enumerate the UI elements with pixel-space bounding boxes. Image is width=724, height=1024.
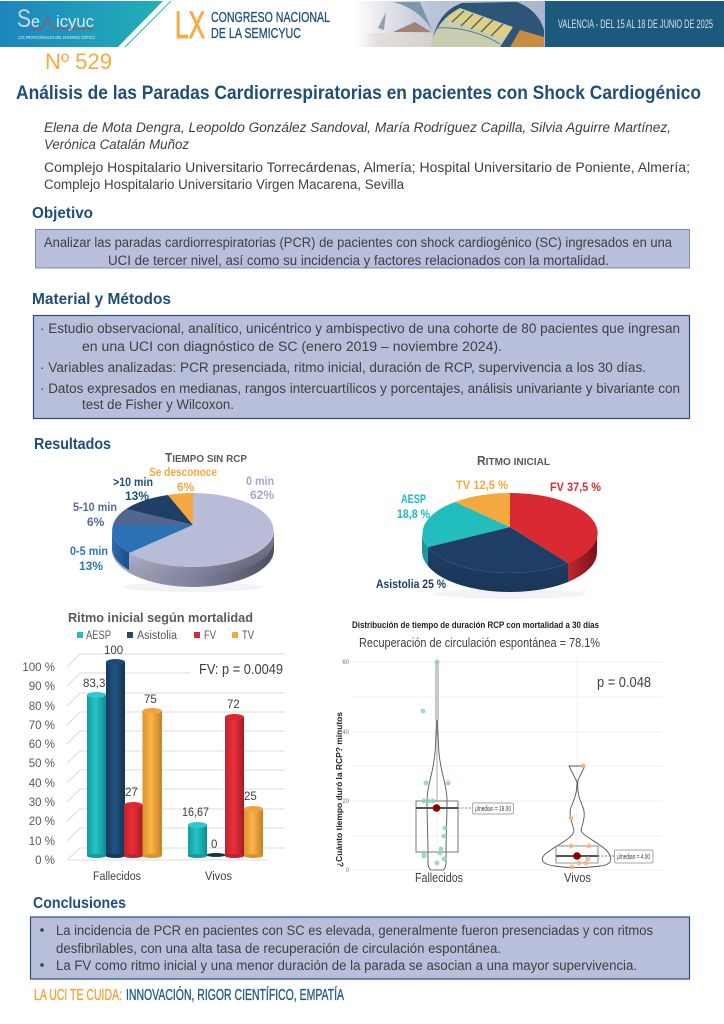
y axis labels: 50 % <box>29 758 55 770</box>
affiliations: Complejo Hospitalario Universitario Torrecárdenas, Almería; Hospital Universitario de Poniente, Almería; <box>44 160 690 175</box>
data labels: 100 <box>104 645 123 657</box>
poster number: Nº 529 <box>45 49 112 74</box>
bars: vivos <box>188 714 263 858</box>
architecture photo <box>353 1 545 47</box>
y axis labels: 80 % <box>29 701 55 713</box>
legend: AESP <box>86 630 111 642</box>
pie labels: ritmo inicial: AESP <box>401 492 426 506</box>
panel: material y métodos: · Estudio observacional, analítico, unicéntrico y ambispectivo de una cohorte de 80 pacientes que ingresan <box>40 321 680 336</box>
data labels: 16,67 <box>182 807 209 819</box>
pie labels: tiempo sin RCP: 13% <box>79 559 103 573</box>
chart: ritmo inicial según mortalidad <box>22 610 285 883</box>
y axis labels: 10 % <box>29 836 55 848</box>
gridlines and axis <box>67 654 285 860</box>
p value: p = 0.048 <box>597 675 651 691</box>
heading: objetivo: Objetivo <box>32 205 93 222</box>
legend: Asistolia <box>137 630 178 642</box>
panel: material y métodos <box>34 316 690 418</box>
panel: material y métodos: en una UCI con diagnóstico de SC (enero 2019 – noviembre 2024). <box>82 339 502 354</box>
median label: vivos <box>614 850 653 863</box>
pie labels: tiempo sin RCP: 5-10 min <box>73 500 117 514</box>
y axis labels: 90 % <box>29 681 55 693</box>
heading: conclusiones: Conclusiones <box>33 895 126 912</box>
panel: objetivo <box>36 230 690 268</box>
slice: mayor de 10 min <box>126 495 193 525</box>
y axis labels: 40 % <box>29 778 55 790</box>
pie labels: tiempo sin RCP: 13% <box>125 489 149 503</box>
pie labels: tiempo sin RCP: 0-5 min <box>70 544 108 558</box>
category labels: Fallecidos <box>415 871 463 885</box>
y axis ticks: 20 <box>342 799 350 805</box>
heading: resultados: Resultados <box>34 436 111 453</box>
pie labels: ritmo inicial: FV 37,5 % <box>550 480 601 494</box>
affiliations: Complejo Hospitalario Universitario Virgen Macarena, Sevilla <box>44 177 404 192</box>
pie labels: ritmo inicial: TV 12,5 % <box>456 478 508 492</box>
pie labels: ritmo inicial: Asistolia 25 % <box>376 577 446 591</box>
pie labels: tiempo sin RCP: 0 min <box>246 474 274 488</box>
panel: material y métodos: · Variables analizadas: PCR presenciada, ritmo inicial, duración de RCP, supervivencia a los 30 días. <box>40 360 646 375</box>
data points: vivos <box>568 764 592 870</box>
violin: vivos <box>542 766 614 868</box>
congress name: LX <box>175 5 205 47</box>
pie labels: tiempo sin RCP: 6% <box>87 515 105 529</box>
legend: TV <box>242 630 254 642</box>
heading: material y métodos: Material y Métodos <box>32 291 171 308</box>
footer slogan: INNOVACIÓN, RIGOR CIENTÍFICO, EMPATÍA <box>126 987 344 1004</box>
data labels <box>83 645 257 851</box>
header banner <box>0 1 724 47</box>
footer slogan <box>34 987 344 1004</box>
y axis labels: 30 % <box>29 797 55 809</box>
logo band <box>0 1 171 47</box>
slice: AESP <box>423 502 510 547</box>
pie labels: ritmo inicial: 18,8 % <box>397 507 430 521</box>
panel: conclusiones: La FV como ritmo inicial y una menor duración de la parada se asocian a una mayor supervivencia. <box>56 958 637 973</box>
y axis labels: 0 % <box>35 855 55 867</box>
median marker: vivos <box>573 852 581 860</box>
pie labels: ritmo inicial <box>376 454 601 591</box>
data labels: 75 <box>144 694 157 706</box>
y axis ticks: 0 <box>346 868 350 874</box>
pie labels: ritmo inicial: RITMO INICIAL <box>477 454 551 468</box>
violin: fallecidos <box>416 662 473 870</box>
pie labels: tiempo sin RCP: 62% <box>250 488 274 502</box>
data labels: 83,3 <box>83 678 105 690</box>
logo band: e <box>31 12 40 31</box>
category labels: Fallecidos <box>93 871 141 883</box>
data points: fallecidos <box>420 660 450 866</box>
logo band: S <box>17 5 31 33</box>
slice: se desconoce <box>168 493 193 525</box>
congress name <box>175 5 330 47</box>
pie labels: tiempo sin RCP: >10 min <box>113 475 153 489</box>
slice: 5-10 min <box>113 509 193 525</box>
date band <box>545 1 724 47</box>
legend: FV <box>204 630 216 642</box>
category labels: Vivos <box>564 871 591 885</box>
panel: material y métodos: test de Fisher y Wilcoxon. <box>82 397 234 412</box>
authors <box>44 120 671 152</box>
data labels: 72 <box>227 699 240 711</box>
logo band: icyuc <box>56 12 94 31</box>
y axis ticks <box>342 660 350 874</box>
footer slogan: LA UCI TE CUIDA: <box>34 987 122 1004</box>
data labels: 0 <box>211 839 217 851</box>
median label: fallecidos: μ̂median = 18.00 <box>475 806 511 813</box>
data labels: 25 <box>244 791 257 803</box>
authors: Verónica Catalán Muñoz <box>44 137 189 152</box>
affiliations <box>44 160 690 192</box>
category labels <box>415 871 591 885</box>
chart title: Ritmo inicial según mortalidad <box>68 610 253 625</box>
pie labels: tiempo sin RCP: TIEMPO SIN RCP <box>165 451 247 465</box>
data labels: 27 <box>125 787 138 799</box>
legend <box>77 630 254 642</box>
median label: fallecidos <box>472 803 514 814</box>
category labels: Vivos <box>205 871 232 883</box>
y axis labels: 100 % <box>22 662 55 674</box>
pie labels: tiempo sin RCP: 6% <box>177 480 195 494</box>
authors: Elena de Mota Dengra, Leopoldo González Sandoval, María Rodríguez Capilla, Silvia Aguirre Martínez, <box>44 120 671 135</box>
chart: tiempo sin RCP pie <box>112 493 274 592</box>
y axis title: ¿Cuánto tiempo duró la RCP? minutos <box>335 711 344 867</box>
y axis labels <box>22 662 55 867</box>
median marker: fallecidos <box>433 804 440 812</box>
congress name: DE LA SEMICYUC <box>211 25 301 42</box>
slice: TV <box>455 493 510 527</box>
y axis labels: 20 % <box>29 816 55 828</box>
p value: FV: p = 0.0049 <box>199 661 283 678</box>
bars: fallecidos <box>87 659 162 858</box>
y axis labels: 70 % <box>29 720 55 732</box>
panel: conclusiones: La incidencia de PCR en pacientes con SC es elevada, generalmente fueron presenciadas y con ritmos <box>56 923 653 938</box>
slice: FV <box>510 493 598 563</box>
plot grid <box>352 656 662 872</box>
y axis ticks: 40 <box>342 730 350 736</box>
subtitle: Recuperación de circulación espontánea = 78.1% <box>359 636 600 650</box>
chart title: Distribución de tiempo de duración RCP con mortalidad a 30 días <box>352 620 599 630</box>
y axis ticks: 60 <box>342 660 350 666</box>
y axis labels: 60 % <box>29 739 55 751</box>
pie labels: tiempo sin RCP <box>70 451 274 573</box>
category labels <box>93 871 232 883</box>
panel: objetivo: Analizar las paradas cardiorrespiratorias (PCR) de pacientes con shock cardiogénico (SC) ingresados en una <box>44 235 672 250</box>
slice: 0 min <box>129 493 273 567</box>
panel: conclusiones <box>30 917 690 979</box>
median label: vivos: μ̂median = 4.00 <box>617 854 650 861</box>
logo band: LOS PROFESIONALES DEL ENFERMO CRÍTICO <box>18 34 95 40</box>
panel: conclusiones: desfibrilables, con una alta tasa de recuperación de circulación espontánea. <box>56 941 501 956</box>
chart: distribución de tiempo de duración RCP <box>335 620 662 885</box>
slice: 0-5 min <box>112 525 193 553</box>
chart: ritmo inicial pie <box>422 493 598 599</box>
panel: objetivo: UCI de tercer nivel, así como su incidencia y factores relacionados con la mortalidad. <box>108 253 609 268</box>
slice: asistolia <box>428 527 568 573</box>
pie labels: tiempo sin RCP: Se desconoce <box>149 465 217 479</box>
congress name: CONGRESO NACIONAL <box>211 9 330 26</box>
panel: material y métodos: · Datos expresados en medianas, rangos intercuartílicos y porcentajes, análisis univariante y bivariante con <box>40 381 680 396</box>
